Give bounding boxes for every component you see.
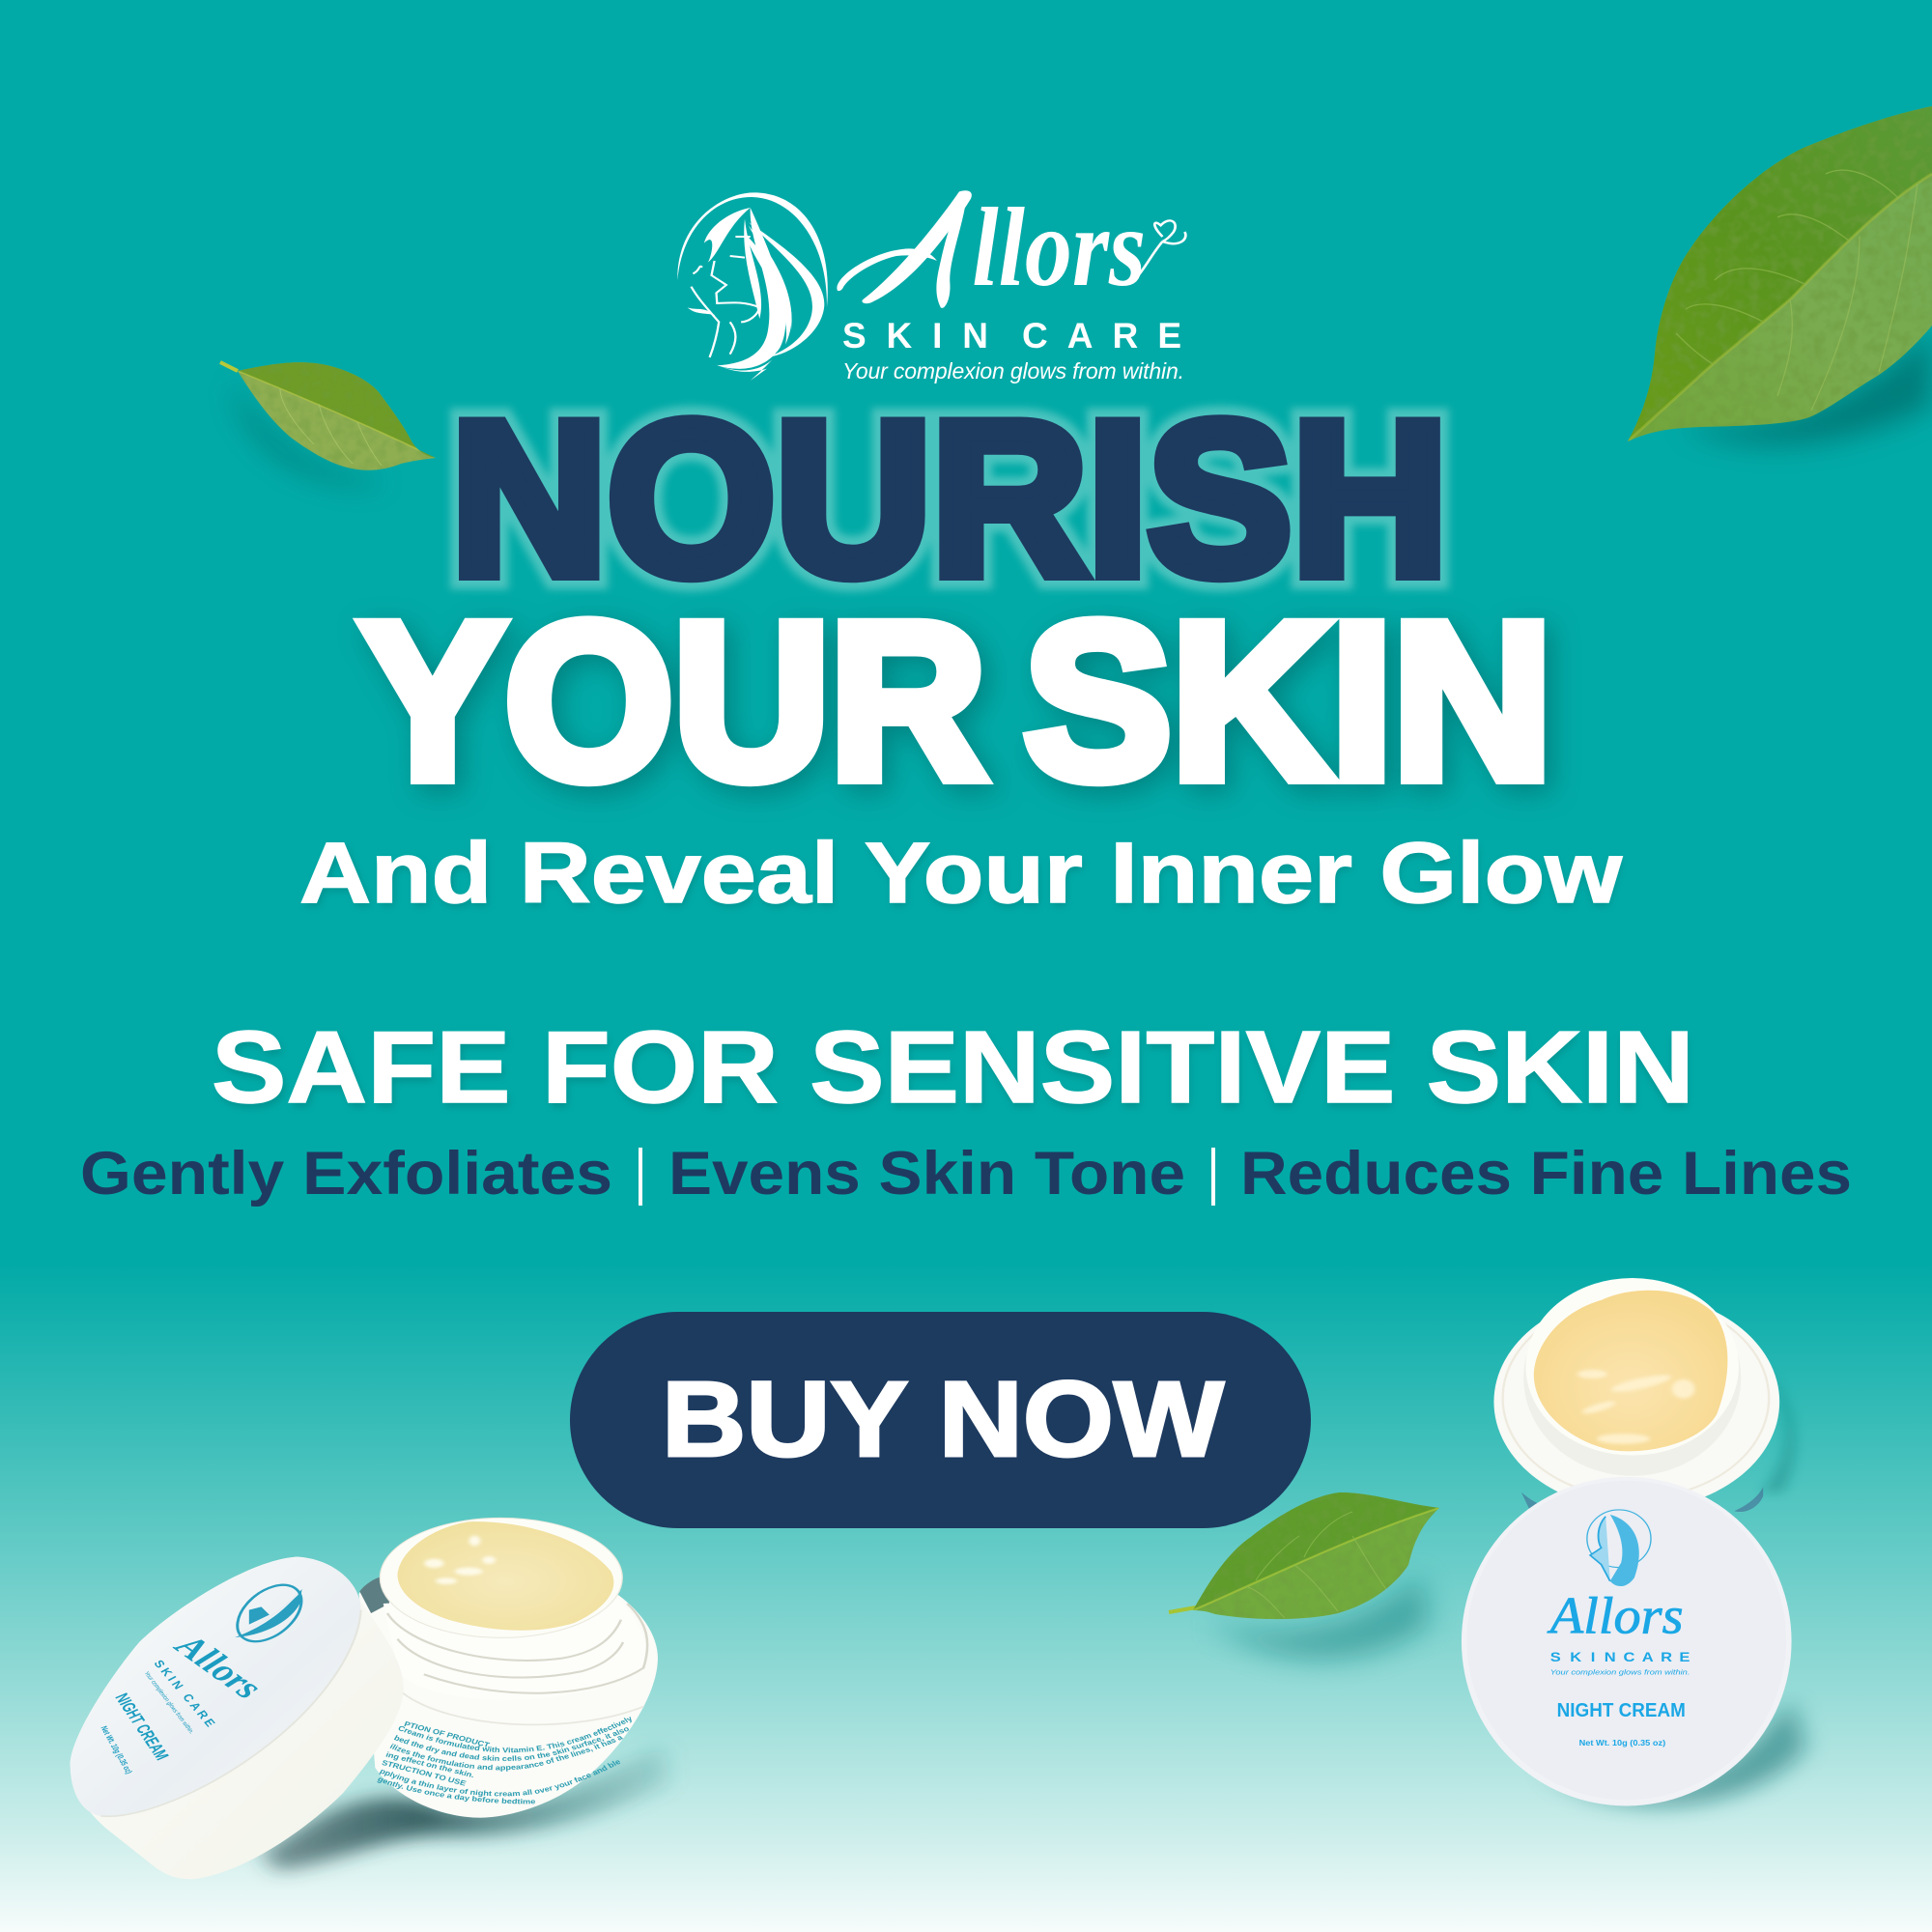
brand logo <box>677 185 1185 384</box>
lid wordmark: Your complexion glows from within. <box>1550 1668 1690 1676</box>
headline: YOUR SKIN: SKIN <box>1032 584 1560 833</box>
benefits list: Reduces Fine Lines <box>1240 1140 1852 1208</box>
benefits list <box>80 1140 1852 1208</box>
logo text: skin care: SKIN <box>842 316 988 355</box>
jar body <box>358 1575 658 1818</box>
lid wordmark: Allors <box>1547 1586 1684 1644</box>
jar side label text: ing effect on the skin. <box>386 1751 473 1777</box>
lid label: Allors <box>166 1627 270 1706</box>
leaf: beside headline <box>220 357 440 484</box>
lid <box>1462 1477 1792 1805</box>
lid wordmark: SKIN <box>1550 1650 1616 1664</box>
lid emblem <box>1587 1510 1651 1586</box>
cream <box>1534 1291 1727 1451</box>
leaf: top right <box>1623 97 1932 444</box>
headline: NOURISH: NOURISH <box>451 376 1448 620</box>
jar neck rim <box>380 1518 622 1637</box>
subheading: inner glow: And Reveal Your Inner Glow <box>299 824 1623 921</box>
jar side label text: gently. Use once a day before bedtime <box>377 1777 535 1804</box>
lid emblem <box>224 1576 314 1651</box>
lid wordmark: CARE <box>1624 1650 1690 1664</box>
headline: NOURISH: NOURISH <box>451 376 1448 620</box>
jar side label text: STRUCTION TO USE: <box>382 1760 467 1786</box>
lid wordmark <box>1547 1586 1690 1747</box>
shadow: left jar <box>261 1746 668 1871</box>
headline: YOUR SKIN: YOUR <box>360 577 986 825</box>
headline: YOUR SKIN <box>360 577 1560 833</box>
jar side label text: PTION OF PRODUCT. <box>404 1721 491 1748</box>
lid wordmark: NIGHT CREAM <box>1557 1699 1686 1721</box>
benefits list: Gently Exfoliates <box>80 1140 612 1208</box>
cream <box>397 1521 613 1631</box>
headline: YOUR SKIN: SKIN <box>1024 577 1552 825</box>
heading: safe for sensitive skin: SAFE FOR SENSITIVE SKIN <box>214 1015 1694 1129</box>
logo text: skin care: CARE <box>1022 316 1181 355</box>
logo text: skin care <box>842 316 1181 355</box>
jar side label text <box>377 1717 632 1804</box>
jar neck <box>1523 1280 1741 1476</box>
jar side label text: pplying a thin layer of night cream all over your face and blend <box>379 1760 620 1797</box>
lid label: Net Wt. 10g (0.35 oz) <box>99 1724 135 1776</box>
product: opened jar and lid, lower left <box>70 1517 675 1882</box>
lid label <box>99 1576 314 1776</box>
logo wordmark: Allors <box>837 185 1185 310</box>
jar side label text: ilizes the formulation and appearance of the lines, it has a <box>390 1736 624 1772</box>
lid label: Your complexion glows from within. <box>142 1670 195 1735</box>
lid <box>71 1557 404 1879</box>
jar side label text: Cream is formulated with Vitamin E. This cream effectively <box>398 1717 632 1752</box>
logo wordmark: Allors: llors <box>972 185 1146 310</box>
headline: YOUR SKIN: YOUR <box>368 584 994 833</box>
button: buy now: BUY NOW <box>662 1360 1224 1479</box>
jar collar <box>384 1591 646 1700</box>
jar neck threads <box>387 1604 647 1693</box>
logo tagline: Your complexion glows from within. <box>842 358 1184 384</box>
lid label: SKIN CARE <box>151 1658 218 1729</box>
subheading: inner glow: And Reveal Your Inner Glow <box>302 828 1623 924</box>
leaf: near button <box>1169 1488 1444 1660</box>
button: buy now <box>570 1312 1311 1528</box>
benefits list: Evens Skin Tone <box>668 1140 1185 1208</box>
jar side label text: bed the dry and dead skin cells on the skin surface, it also <box>394 1727 629 1762</box>
shadow: right jar <box>1539 1699 1805 1806</box>
lid label: NIGHT CREAM <box>111 1690 173 1763</box>
lid wordmark: Net Wt. 10g (0.35 oz) <box>1579 1739 1665 1747</box>
jar base <box>1493 1293 1779 1510</box>
product: jar and lid, lower right <box>1462 1278 1805 1806</box>
heading: safe for sensitive skin: SAFE FOR SENSITIVE SKIN <box>212 1010 1694 1124</box>
logo emblem: woman's profile in a circle <box>677 192 828 381</box>
